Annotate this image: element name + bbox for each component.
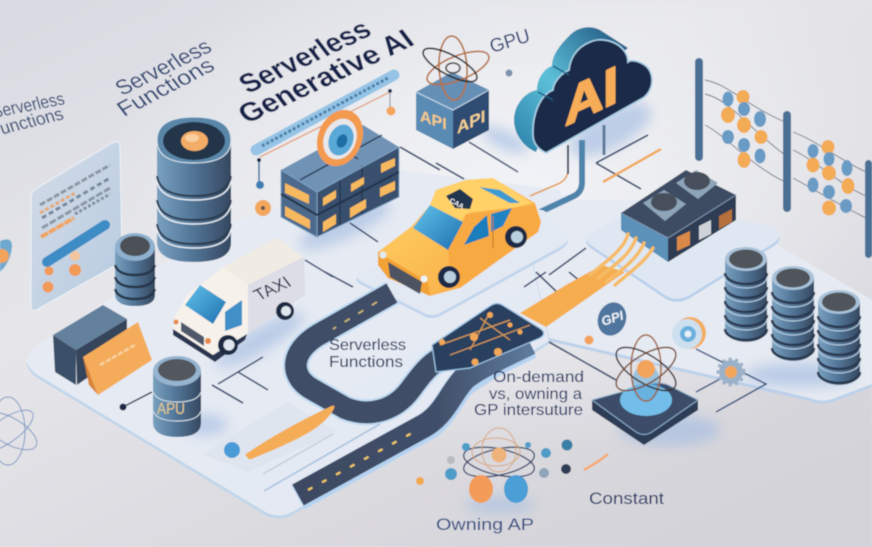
- front of car: [378, 252, 430, 296]
- icon: AI cloud: [514, 27, 652, 153]
- text: serverless functions in road loop: Serverless: [329, 337, 406, 354]
- panel: grey box and orange card: [53, 305, 152, 395]
- icon: small dot: [506, 70, 512, 76]
- text: on-demand vs owning: On-demand: [493, 369, 584, 386]
- icon: lens: [672, 317, 706, 349]
- text: serverless functions in road loop: [329, 337, 406, 371]
- icon: APU cylinder: [153, 356, 201, 437]
- van rear wheel: [276, 302, 294, 320]
- icon: upper road: [296, 293, 465, 412]
- GPU port labels: [677, 231, 690, 251]
- icon: API cube: API: [457, 106, 485, 138]
- icon: storage stack 1: [725, 247, 767, 342]
- van label: TAXI: [249, 272, 295, 304]
- icon: small stacked cylinder: [115, 233, 155, 306]
- icon: yellow taxi: [378, 178, 541, 296]
- icon: storage stack 3: [818, 290, 860, 385]
- text: on-demand vs owning: [474, 369, 584, 419]
- taxi sign: [446, 189, 473, 209]
- panel: GPU plate: [586, 203, 780, 302]
- card dots: [42, 251, 81, 292]
- icon: small orange spark: [416, 477, 424, 485]
- label: owning AP: Owning AP: [436, 515, 534, 534]
- front wheel: [438, 266, 460, 288]
- text: serverless functions in road loop: Functions: [329, 354, 403, 371]
- label: GPU: GPU: [487, 26, 533, 58]
- van grille: [181, 322, 204, 346]
- icon: storage stack 2: [772, 266, 814, 361]
- title: Serverless: [232, 13, 377, 99]
- atom rings: [419, 35, 493, 101]
- large blue ball: [504, 475, 528, 503]
- panel: right platform: [520, 200, 872, 404]
- APU label: APU: [157, 401, 185, 418]
- rear roof glass: [479, 187, 520, 203]
- icon: orange target disc: [309, 103, 371, 173]
- icon: GPI pill badge: [593, 298, 631, 340]
- label: constant: Constant: [589, 489, 664, 508]
- connector: dot and line: [120, 392, 152, 410]
- card button: [47, 225, 105, 262]
- panel: circuit board: [432, 304, 544, 372]
- side windows: [464, 215, 489, 245]
- server labels: [285, 158, 395, 232]
- shadows: [183, 93, 855, 513]
- icon: orange ribbon cable: [520, 234, 653, 327]
- windshield: [413, 205, 463, 250]
- icon: lower road: [298, 343, 530, 497]
- large orange ball: [469, 475, 493, 503]
- panel: glass card with orange pen: [202, 402, 380, 491]
- icon: cloud pipes: [530, 125, 661, 212]
- progress bar: blue pill: [255, 75, 396, 216]
- fence poles: [695, 58, 872, 258]
- heading: serverless functions center: Serverless: [110, 34, 216, 100]
- card text lines: [40, 165, 110, 237]
- rear wheel: [505, 226, 527, 248]
- icon: large database cylinder: [157, 117, 231, 262]
- icon: GPU box: [621, 170, 736, 262]
- cube labels: API: [420, 107, 447, 134]
- blue nodes: [722, 92, 852, 213]
- icon: neural net fence: [695, 58, 872, 258]
- text: on-demand vs owning: GP intersuture: [474, 402, 583, 419]
- orange nodes: [721, 90, 854, 216]
- icon: white delivery van: [173, 238, 305, 362]
- icon: yellow taxi: CAA: [448, 198, 465, 211]
- heading: serverless functions center: Functions: [112, 53, 219, 121]
- van front wheel: [218, 335, 238, 355]
- icon: API cube: [416, 35, 493, 149]
- fence wires: [705, 80, 866, 218]
- icon: partial badge left: [0, 239, 12, 272]
- title: Generative AI: [231, 23, 420, 129]
- connector lines: [696, 349, 766, 412]
- cloud label: AI: [565, 54, 618, 137]
- icon: server blocks: [281, 125, 399, 237]
- panel: main platform: [27, 170, 600, 519]
- panel: car platform: [356, 210, 568, 318]
- text: on-demand vs owning: vs, owning a: [489, 386, 582, 403]
- panel: left document card: [31, 142, 122, 310]
- car body: [378, 178, 541, 296]
- van windshield: [185, 285, 226, 324]
- icon: atom device: [592, 335, 698, 445]
- van side window: [225, 300, 242, 331]
- side panel: [448, 205, 541, 288]
- icon: GPI pill badge: GPI: [599, 308, 626, 329]
- small nodes: [445, 442, 551, 480]
- grid lines: [212, 135, 648, 403]
- icon: gear: [719, 360, 743, 384]
- icon: orange dot: [584, 336, 594, 344]
- icon: molecule atom: [445, 428, 608, 503]
- GPU sensors: [643, 190, 686, 221]
- icon: sketch atom bottom left: [0, 397, 42, 465]
